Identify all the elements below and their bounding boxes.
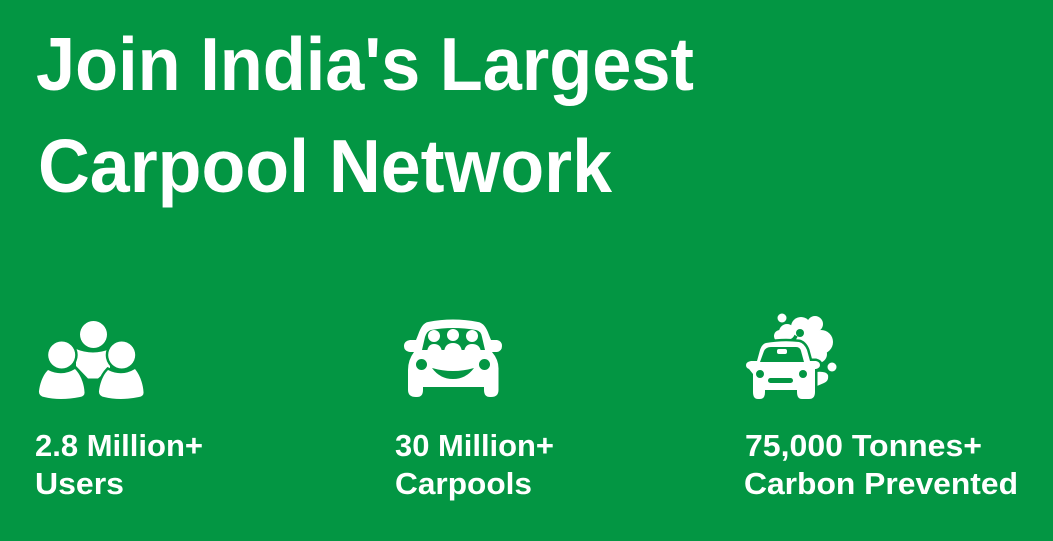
icon: smiling car with passengers (404, 320, 502, 397)
stat: carpools (395, 320, 554, 501)
label: carbon prevented: Carbon Prevented (744, 466, 1018, 501)
label: carpools (395, 428, 554, 501)
icon: car with exhaust cloud (746, 314, 836, 399)
label: carbon prevented (744, 428, 1018, 501)
title: Carpool Network (38, 124, 612, 208)
label: users: 2.8 Million+ (35, 428, 203, 463)
title (36, 22, 694, 208)
label: users (35, 428, 203, 501)
label: users: Users (35, 466, 124, 501)
stat: carbon prevented (744, 314, 1018, 501)
label: carpools: 30 Million+ (395, 428, 554, 463)
icon: three people (39, 321, 144, 399)
title: Join India's Largest (36, 22, 694, 106)
label: carbon prevented: 75,000 Tonnes+ (745, 428, 982, 463)
stat: users (35, 321, 203, 501)
label: carpools: Carpools (395, 466, 532, 501)
